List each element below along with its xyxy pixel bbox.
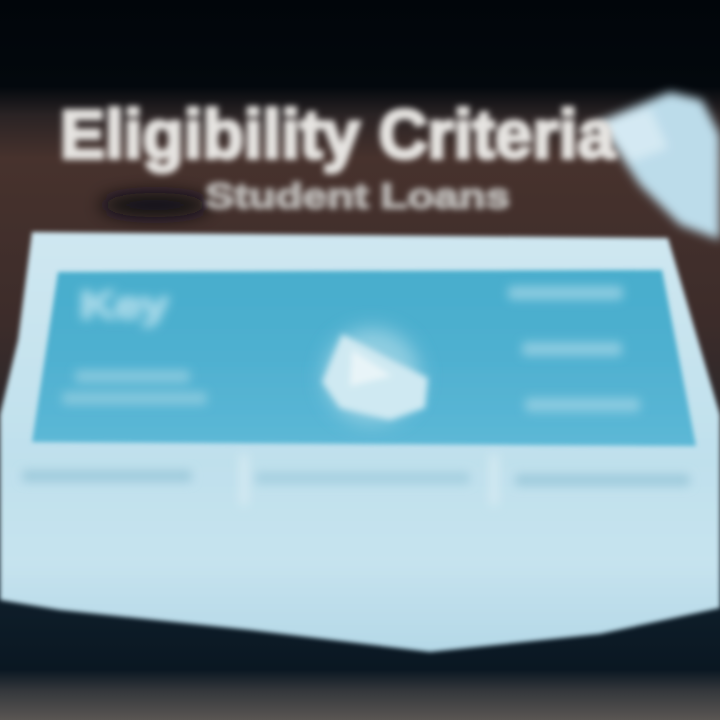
text block: right column labels on teal panel <box>508 286 640 412</box>
icon: central triangle symbol <box>322 328 428 424</box>
text block: lower-left caption on teal panel <box>62 370 207 405</box>
panel: teal header block <box>32 270 696 446</box>
subtitle: Student Loans <box>205 177 510 216</box>
panel: paper sheet <box>0 232 720 652</box>
title: Eligibility Criteria <box>60 96 616 173</box>
text block: upper-left heading on teal panel: Key <box>80 285 168 327</box>
dark shadow under heading <box>100 193 210 217</box>
icon: folded paper corner at upper right <box>598 92 720 240</box>
text block: row of captions below teal panel <box>22 455 690 505</box>
